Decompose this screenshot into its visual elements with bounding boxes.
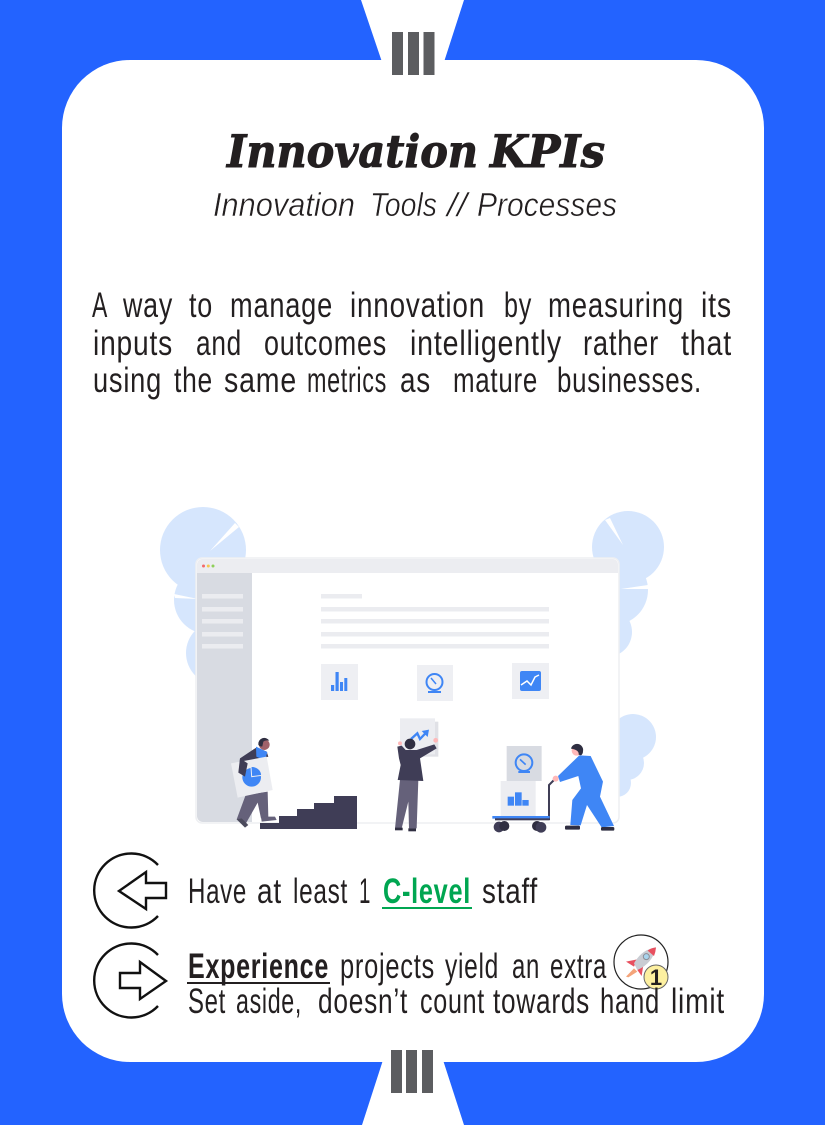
- subtitle: Innovation: [213, 186, 355, 223]
- foliage right: [578, 511, 664, 797]
- output effect text: towards: [493, 982, 590, 1021]
- foliage left: [160, 507, 250, 685]
- description text: way: [122, 286, 173, 325]
- bottom notch: [362, 1060, 464, 1125]
- output effect text: aside,: [236, 982, 302, 1021]
- person carrying pie chart: [231, 738, 277, 828]
- output effect text: count: [420, 982, 485, 1021]
- illustration: dashboard with people: [160, 507, 664, 833]
- description text: innovation: [350, 286, 485, 325]
- box with gauge: [507, 746, 542, 781]
- description text: measuring: [548, 286, 684, 325]
- person holding chart poster: [395, 718, 438, 831]
- description text: inputs: [93, 324, 173, 363]
- icon: output arrow in circle: [94, 944, 166, 1018]
- stairs: [260, 796, 357, 829]
- description text: same: [224, 361, 297, 400]
- input requirement text: staff: [482, 872, 538, 911]
- description text: as: [400, 361, 431, 400]
- person pushing cart: [492, 744, 614, 833]
- input requirement text: least: [293, 872, 348, 911]
- description text: outcomes: [264, 324, 387, 363]
- icon: bottom tally bars: [391, 1050, 433, 1093]
- subtitle: Processes: [477, 186, 617, 223]
- title: Innovation: [225, 125, 478, 178]
- description text: A: [92, 286, 108, 325]
- output effect text: projects: [340, 947, 435, 986]
- description text: and: [196, 324, 242, 363]
- icon: line chart tile: [512, 663, 549, 699]
- output effect text: Set: [188, 982, 226, 1021]
- description text: that: [681, 324, 732, 363]
- icon: rocket token: [614, 935, 668, 990]
- description text: metrics: [307, 361, 387, 400]
- description text: rather: [583, 324, 659, 363]
- description text: to: [189, 286, 213, 325]
- subtitle: Tools: [370, 186, 437, 223]
- output effect text: doesn’t: [318, 982, 408, 1021]
- output effect text: limit: [671, 982, 725, 1021]
- input requirement text: [188, 872, 538, 911]
- output effect text: Experience: [188, 947, 329, 986]
- subtitle: [213, 186, 617, 223]
- input requirement text: C-level: [383, 872, 471, 911]
- description text: manage: [230, 286, 333, 325]
- description text: using: [93, 361, 162, 400]
- description text: its: [701, 286, 732, 325]
- description text: the: [174, 361, 213, 400]
- description text: [92, 286, 732, 400]
- top notch: [361, 0, 464, 62]
- browser window: [196, 558, 619, 823]
- subtitle: //: [445, 186, 470, 223]
- icon: gauge tile: [417, 665, 453, 701]
- icon: rocket token: 1: [650, 965, 662, 990]
- cart: [492, 780, 554, 833]
- output effect text: yield: [445, 947, 499, 986]
- input requirement text: Have: [188, 872, 247, 911]
- description text: by: [504, 286, 532, 325]
- output effect text: [187, 947, 725, 1021]
- box with bars: [501, 781, 536, 816]
- icon: bar chart tile: [321, 664, 358, 700]
- icon: input arrow in circle: [94, 854, 166, 928]
- icon: top tally bars: [392, 32, 434, 75]
- input requirement text: 1: [359, 872, 371, 911]
- output effect text: an: [512, 947, 540, 986]
- output effect text: extra: [550, 947, 607, 986]
- description text: intelligently: [410, 324, 562, 363]
- description text: mature: [453, 361, 538, 400]
- output effect text: hand: [600, 982, 660, 1021]
- panel: white card: [62, 60, 764, 1062]
- description text: businesses.: [557, 361, 702, 400]
- title: KPIs: [488, 125, 605, 178]
- input requirement text: at: [257, 872, 282, 911]
